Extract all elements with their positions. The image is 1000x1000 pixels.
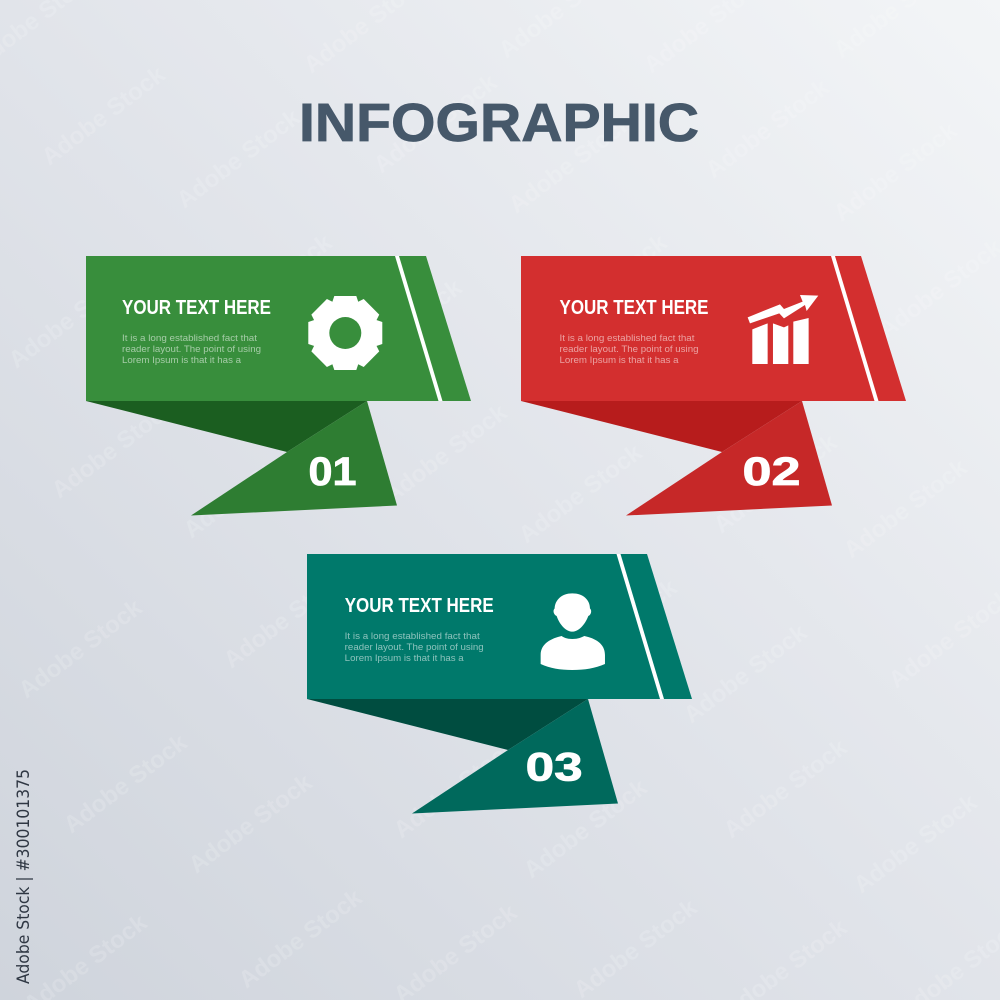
stock watermarks: Adobe Stock xyxy=(719,734,853,844)
body text 02: reader layout. The point of using xyxy=(560,344,698,355)
stock watermarks: Adobe Stock xyxy=(829,117,963,227)
ribbon tail xyxy=(412,699,618,814)
stock watermarks: Adobe Stock xyxy=(47,394,181,504)
stock watermarks: Adobe Stock xyxy=(849,789,983,899)
stock watermarks: Adobe Stock xyxy=(539,229,673,339)
stock watermarks: Adobe Stock xyxy=(504,109,638,219)
body text 03: reader layout. The point of using xyxy=(345,642,484,653)
stock watermarks: Adobe Stock xyxy=(4,264,138,374)
icon: rising bar chart xyxy=(748,295,818,364)
heading 02: YOUR TEXT HERE xyxy=(560,296,708,319)
stock watermarks: Adobe Stock xyxy=(349,609,483,719)
body text 01: It is a long established fact that xyxy=(122,333,257,344)
stock watermarks: Adobe Stock xyxy=(234,884,368,994)
stock watermarks: Adobe Stock xyxy=(179,434,313,544)
ribbon tail xyxy=(191,401,397,516)
stock watermarks: Adobe Stock xyxy=(172,104,306,214)
body text 02 xyxy=(560,333,698,366)
stock watermarks: Adobe Stock xyxy=(369,69,503,179)
ribbon main band xyxy=(521,256,906,401)
panel: 02 red ribbon xyxy=(521,256,906,516)
body text 03: Lorem Ipsum is that it has a xyxy=(345,653,464,664)
body text 03 xyxy=(345,631,484,664)
stock watermarks: Adobe Stock xyxy=(389,734,523,844)
number 02: 02 xyxy=(742,450,800,494)
stock watermarks: Adobe Stock xyxy=(204,229,338,339)
stock watermarks: Adobe Stock xyxy=(669,274,803,384)
ribbon tail xyxy=(626,401,832,516)
number 01: 01 xyxy=(308,450,356,494)
heading 01: YOUR TEXT HERE xyxy=(122,296,271,319)
body text 02: It is a long established fact that xyxy=(560,333,695,344)
ribbon main band xyxy=(86,256,471,401)
body text 01: Lorem Ipsum is that it has a xyxy=(122,355,242,366)
stock watermarks: Adobe Stock xyxy=(679,619,813,729)
stock watermarks: Adobe Stock xyxy=(839,454,973,564)
ribbon fold shadow xyxy=(86,401,367,452)
body text 01: reader layout. The point of using xyxy=(122,344,261,355)
icon: person xyxy=(541,593,605,670)
ribbon main band xyxy=(307,554,692,699)
stock watermarks: Adobe Stock xyxy=(519,774,653,884)
stock watermarks: Adobe Stock xyxy=(37,61,171,171)
number 03: 03 xyxy=(526,746,583,790)
stock watermarks: Adobe Stock xyxy=(709,429,843,539)
stock id side label: Adobe Stock | #300101375 xyxy=(14,769,34,984)
body text 03: It is a long established fact that xyxy=(345,631,480,642)
icon: gear xyxy=(308,296,382,370)
stock watermarks: Adobe Stock xyxy=(334,274,468,384)
ribbon fold shadow xyxy=(521,401,802,452)
stock watermarks: Adobe Stock xyxy=(184,769,318,879)
white diagonal stripe xyxy=(616,554,664,699)
stock watermarks: Adobe Stock xyxy=(14,594,148,704)
body text 02: Lorem Ipsum is that it has a xyxy=(560,355,679,366)
panel: 01 green ribbon xyxy=(86,256,471,516)
stock watermarks: Adobe Stock xyxy=(514,439,648,549)
ribbon fold shadow xyxy=(307,699,588,750)
stock watermarks: Adobe Stock xyxy=(59,729,193,839)
stock watermarks: Adobe Stock xyxy=(549,574,683,684)
title: INFOGRAPHIC xyxy=(299,93,699,153)
white diagonal stripe xyxy=(395,256,442,401)
heading 03: YOUR TEXT HERE xyxy=(345,594,494,617)
stock watermarks: Adobe Stock xyxy=(219,564,353,674)
stock watermarks: Adobe Stock xyxy=(379,399,513,509)
stock watermarks: Adobe Stock xyxy=(701,74,835,184)
panel: 03 teal ribbon xyxy=(307,554,692,814)
body text 01 xyxy=(122,333,261,366)
white diagonal stripe xyxy=(831,256,878,401)
